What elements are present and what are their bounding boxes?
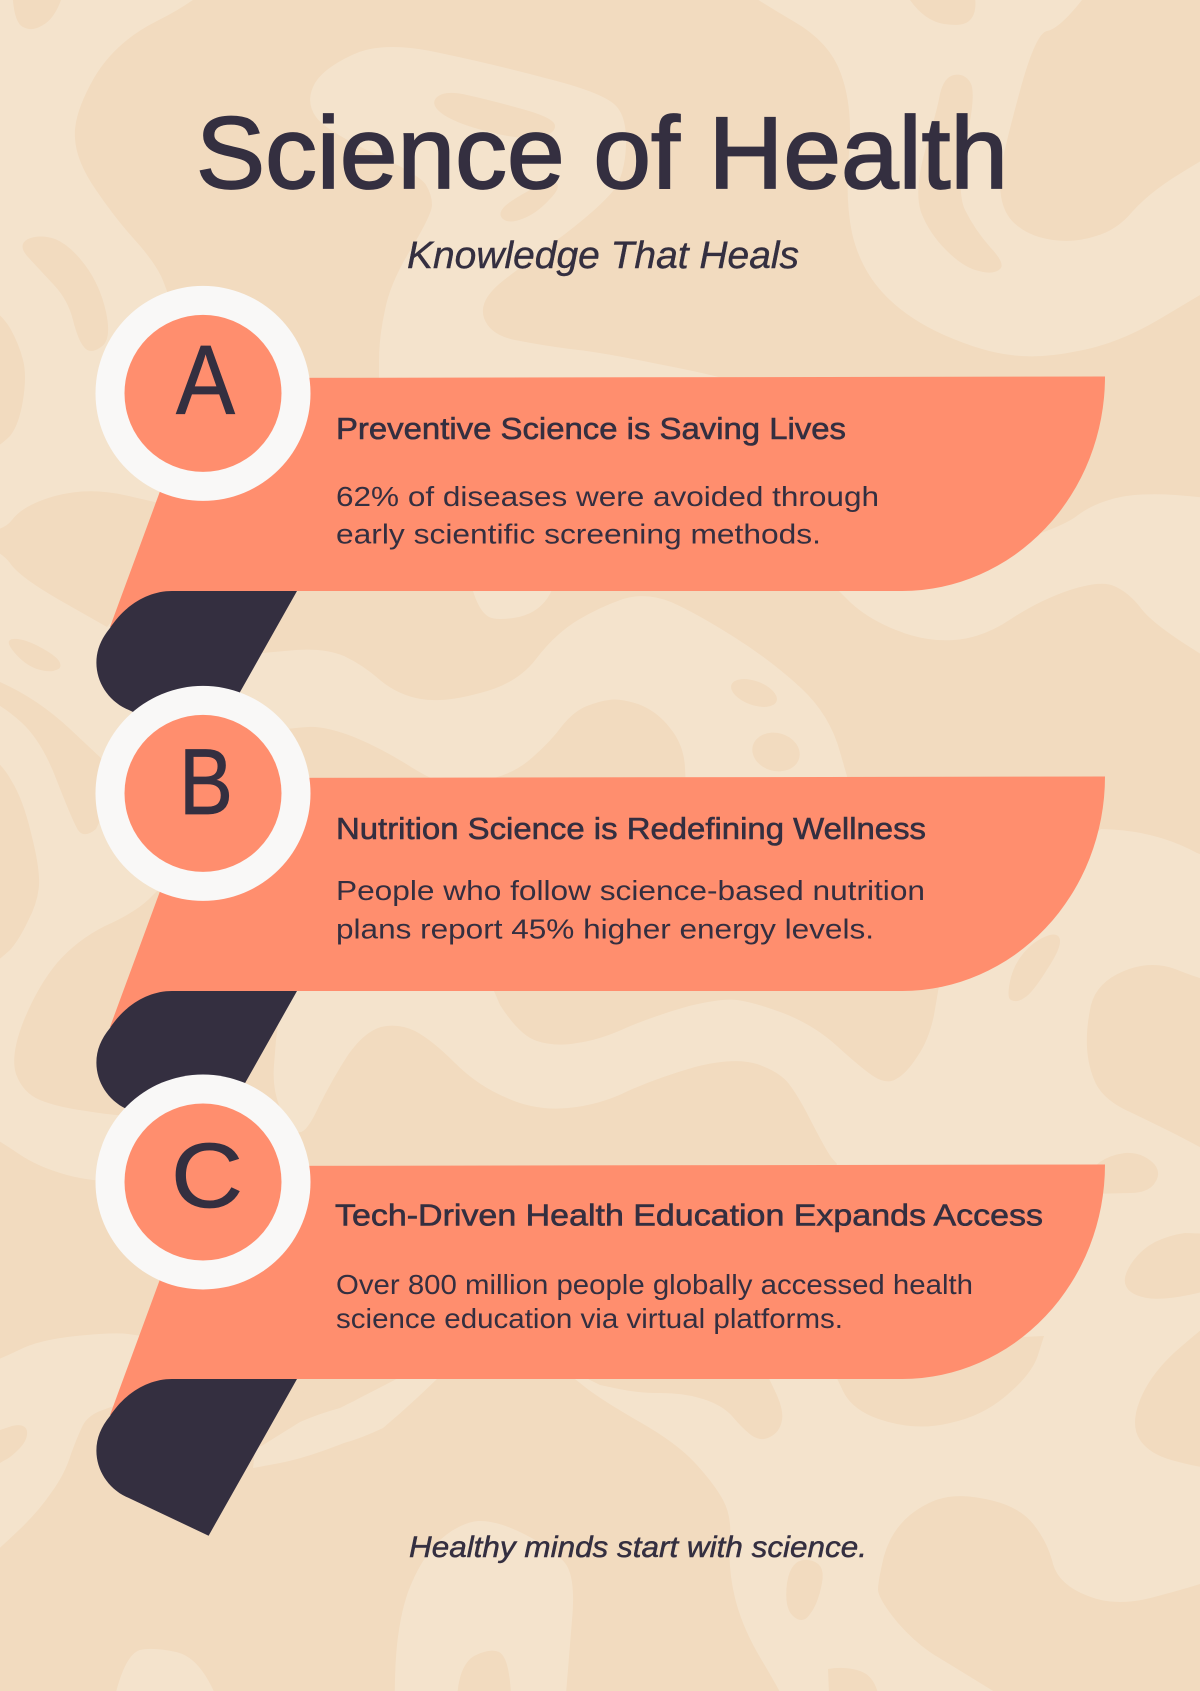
body A [336, 481, 879, 550]
heading C: Tech-Driven Health Education Expands Access [335, 1198, 1043, 1232]
heading B: Nutrition Science is Redefining Wellness [336, 811, 926, 846]
ribbon A [110, 376, 1105, 640]
panel: A preventive science [96, 286, 1105, 748]
dark fold C [96, 1379, 297, 1536]
body C [336, 1269, 973, 1334]
badge C [96, 1074, 310, 1290]
footer tagline: Healthy minds start with science. [409, 1531, 867, 1564]
body C: science education via virtual platforms. [336, 1303, 843, 1334]
title: Science of Health [196, 96, 1008, 210]
subtitle: Knowledge That Heals [407, 235, 799, 277]
body A: early scientific screening methods. [336, 518, 821, 550]
badge B: B [179, 729, 233, 834]
ribbon C [110, 1164, 1105, 1428]
badge B [96, 686, 310, 901]
dark fold B [96, 991, 297, 1148]
body B: plans report 45% higher energy levels. [336, 914, 874, 944]
badge C: C [171, 1125, 243, 1227]
panel: B nutrition science [96, 686, 1105, 1148]
dark fold A [96, 591, 297, 748]
badge A: A [176, 325, 236, 435]
panel: C tech-driven education [96, 1074, 1105, 1536]
heading A: Preventive Science is Saving Lives [336, 411, 846, 446]
body A: 62% of diseases were avoided through [336, 481, 879, 512]
body B [336, 875, 925, 944]
badge A [96, 286, 310, 501]
body B: People who follow science-based nutrition [336, 875, 925, 906]
ribbon B [110, 776, 1105, 1040]
body C: Over 800 million people globally accessed health [336, 1269, 973, 1300]
